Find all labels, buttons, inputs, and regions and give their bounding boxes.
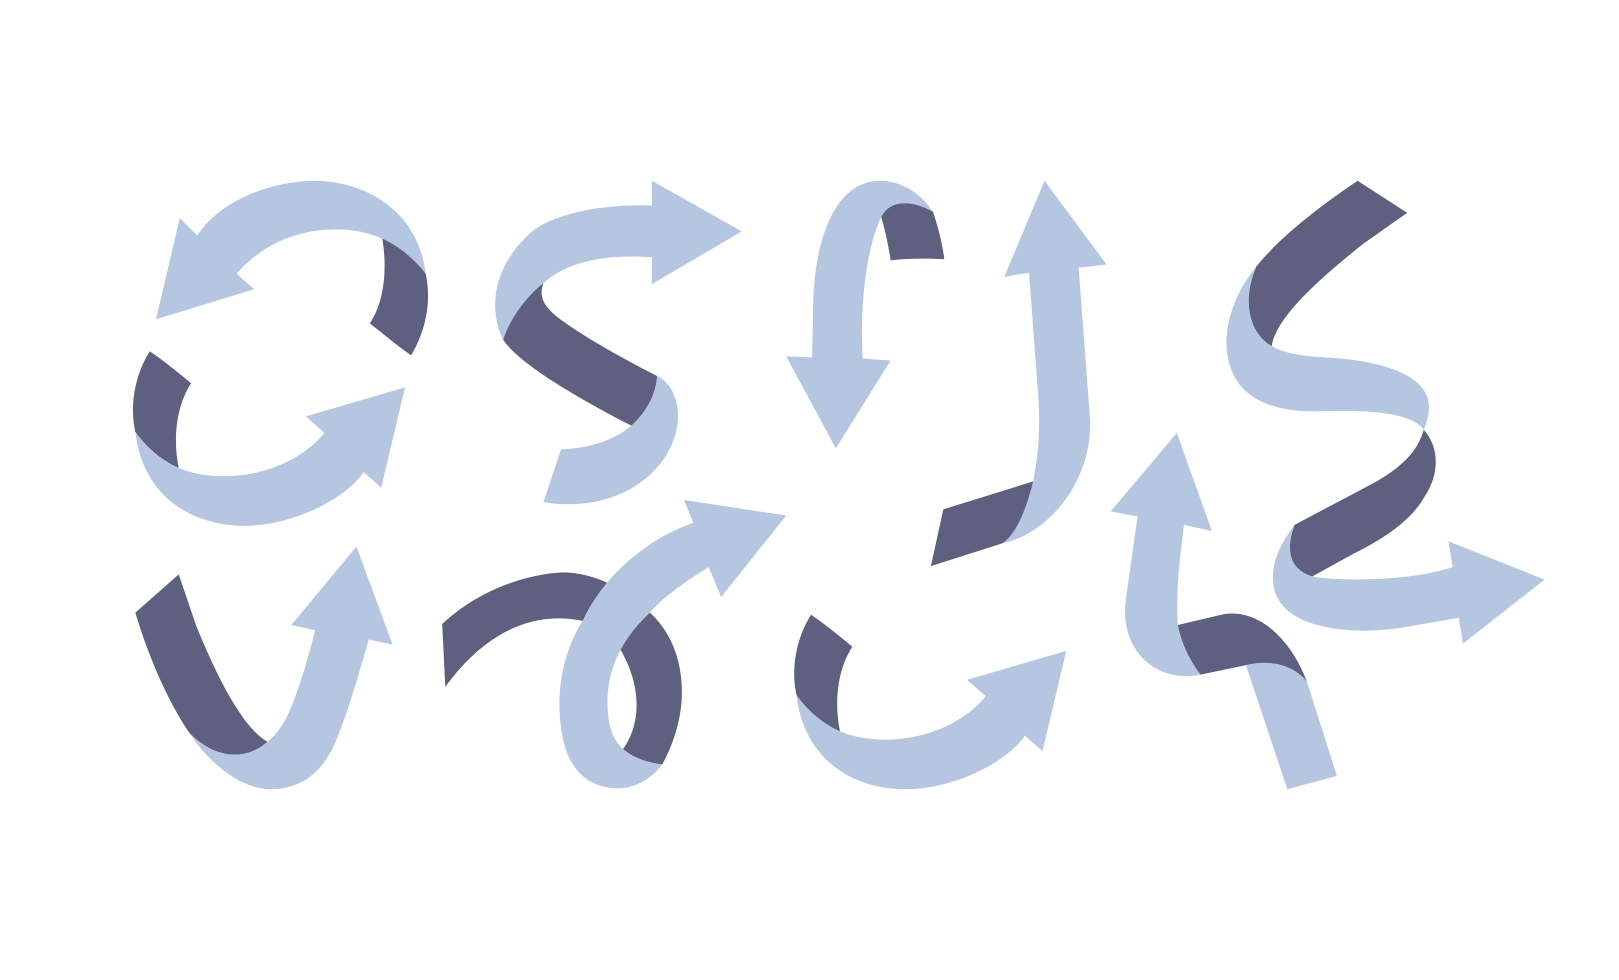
ribbon front with arrowhead (559, 500, 786, 788)
ribbon front with arrowhead (189, 547, 393, 789)
lower fold (1290, 430, 1436, 576)
ribbon fold (133, 351, 191, 468)
arrow: zigzag, pointing up (1111, 433, 1337, 789)
ribbon front with arrowhead (1002, 181, 1107, 543)
arrow: looped, pointing upper right (442, 500, 786, 788)
middle ribbon (1226, 267, 1429, 430)
ribbon front with arrowhead (135, 387, 405, 526)
arrow: S-curve, pointing right (495, 181, 742, 504)
ribbon front with arrowhead (786, 181, 933, 448)
bottom ribbon with arrowhead (1273, 525, 1545, 644)
top ribbon with arrowhead (495, 181, 742, 340)
arrow: long, pointing up (931, 181, 1107, 566)
ribbon tail (442, 572, 610, 687)
top ribbon with arrowhead (1111, 433, 1212, 676)
ribbon fold (794, 615, 852, 731)
arrow: circular, pointing upper right (133, 351, 405, 526)
arrow: winding ribbon, pointing right (1226, 181, 1545, 644)
arrow: V-shaped, pointing up (135, 547, 393, 789)
ribbon tail (135, 574, 268, 755)
ribbon front with arrowhead (156, 181, 426, 319)
arrow: curved, pointing upper right (794, 615, 1066, 789)
ribbon tail (1246, 663, 1337, 789)
top ribbon tail (1249, 181, 1407, 346)
ribbon fold (881, 203, 944, 260)
ribbon fold (370, 239, 428, 355)
loop back section (620, 613, 682, 764)
ribbon tail (543, 376, 678, 504)
ribbon fold (931, 481, 1033, 566)
ribbon fold (1178, 614, 1307, 682)
arrow: circular, pointing lower left (156, 181, 428, 355)
ribbon front with arrowhead (797, 651, 1066, 789)
arrow: hook, pointing down (786, 181, 944, 448)
ribbon fold (503, 283, 657, 426)
